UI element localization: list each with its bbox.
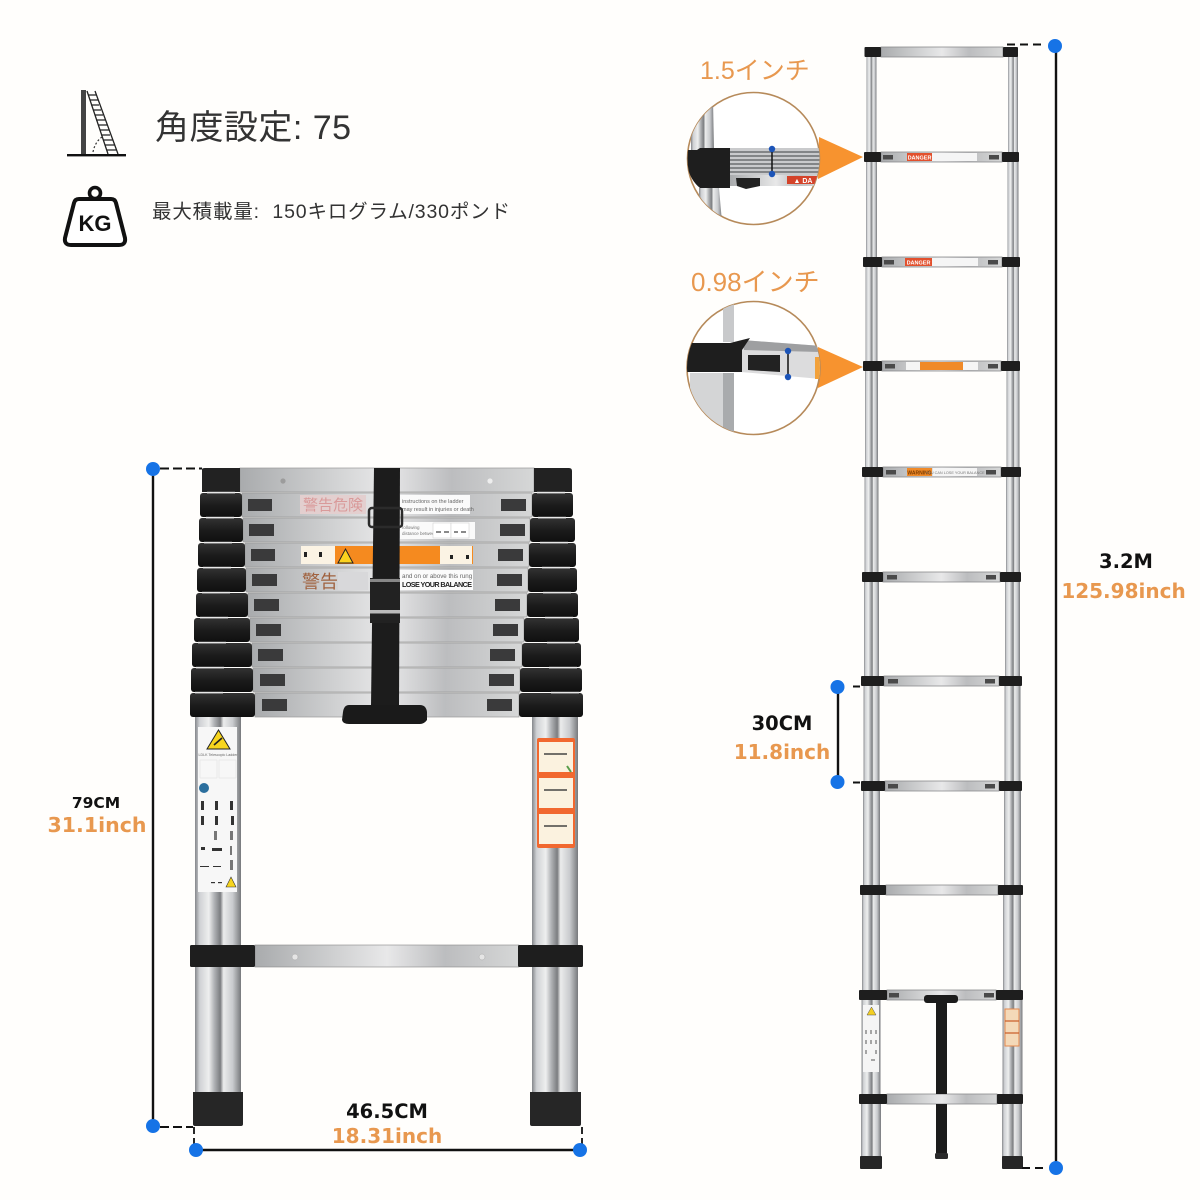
rungs (859, 47, 1023, 1104)
safety sticker left tube (198, 727, 238, 892)
rung stickers: DANGER (908, 156, 931, 162)
safety sticker left tube: LDLK Telescopic Ladder (199, 753, 238, 757)
rubber feet (193, 1092, 581, 1126)
dimension: folded height (72, 462, 202, 1133)
callout: rung width 0.98 inch (687, 267, 863, 434)
extended ladder (right) (859, 47, 1023, 1169)
label: 11.8 inch: 11.8inch (734, 740, 830, 764)
instruction sticker right tube (537, 738, 575, 848)
label: 1.5 inch: 1.5インチ (700, 57, 810, 85)
callout arrow (818, 137, 863, 179)
rung labels on folded stack: and on or above this rung (402, 573, 473, 580)
label: 18.31 inch: 18.31inch (332, 1124, 442, 1148)
magnified rung (688, 106, 820, 216)
dimension: extended height (1007, 39, 1153, 1175)
rung labels on folded stack: LOSE YOUR BALANCE (402, 580, 472, 589)
stowed strap and handle (924, 995, 958, 1159)
rung labels on folded stack (300, 495, 475, 592)
magnified rung: ▲ DA (794, 178, 812, 185)
label: 31.1 inch: 31.1inch (48, 813, 146, 837)
icon: KG weight (65, 188, 125, 245)
feet (860, 1156, 1023, 1169)
dimension: folded width (189, 1100, 587, 1157)
ladder tubes (195, 712, 578, 1097)
lower tube stickers (863, 1005, 1019, 1072)
rung stickers: YOU CAN LOSE YOUR BALANCE (925, 471, 985, 475)
rung stickers: DANGER (907, 260, 930, 266)
rung labels on folded stack: instructions on the ladder (402, 499, 464, 505)
folded rung stack (190, 468, 583, 717)
heading: angle setting: 角度設定: 75 (155, 109, 351, 147)
folded ladder (left) (190, 468, 583, 1126)
label: 46.5CM: 46.5CM (346, 1100, 428, 1123)
rung labels on folded stack: distance between (402, 531, 438, 536)
rung labels on folded stack: 警告 (302, 572, 338, 592)
label: 0.98 inch: 0.98インチ (691, 267, 820, 297)
label: 30CM: 30CM (752, 712, 812, 735)
label: 79CM: 79CM (72, 794, 120, 812)
callout arrow (818, 347, 863, 388)
icon: ladder angle (67, 90, 126, 156)
rung stickers (905, 153, 985, 476)
bottom rung (190, 945, 583, 967)
icon: KG weight: KG (78, 211, 112, 236)
rung stickers: WARNING (907, 470, 932, 476)
callout: rung width 1.5 inch (687, 57, 863, 224)
rung labels on folded stack: may result in injuries or death (402, 507, 474, 513)
label: 3.2M: 3.2M (1099, 550, 1153, 573)
rung labels on folded stack: 警告危険 (303, 497, 363, 514)
dimension: rung spacing (752, 680, 860, 789)
text: maximum load: 最大積載量: 150キログラム/330ポンド (152, 201, 510, 223)
magnified rung joint (687, 302, 822, 433)
extended ladder tubes (861, 55, 1022, 1158)
rung labels on folded stack: following (402, 525, 420, 530)
label: 125.98 inch: 125.98inch (1061, 579, 1186, 603)
strap with buckles and handle (342, 468, 427, 724)
